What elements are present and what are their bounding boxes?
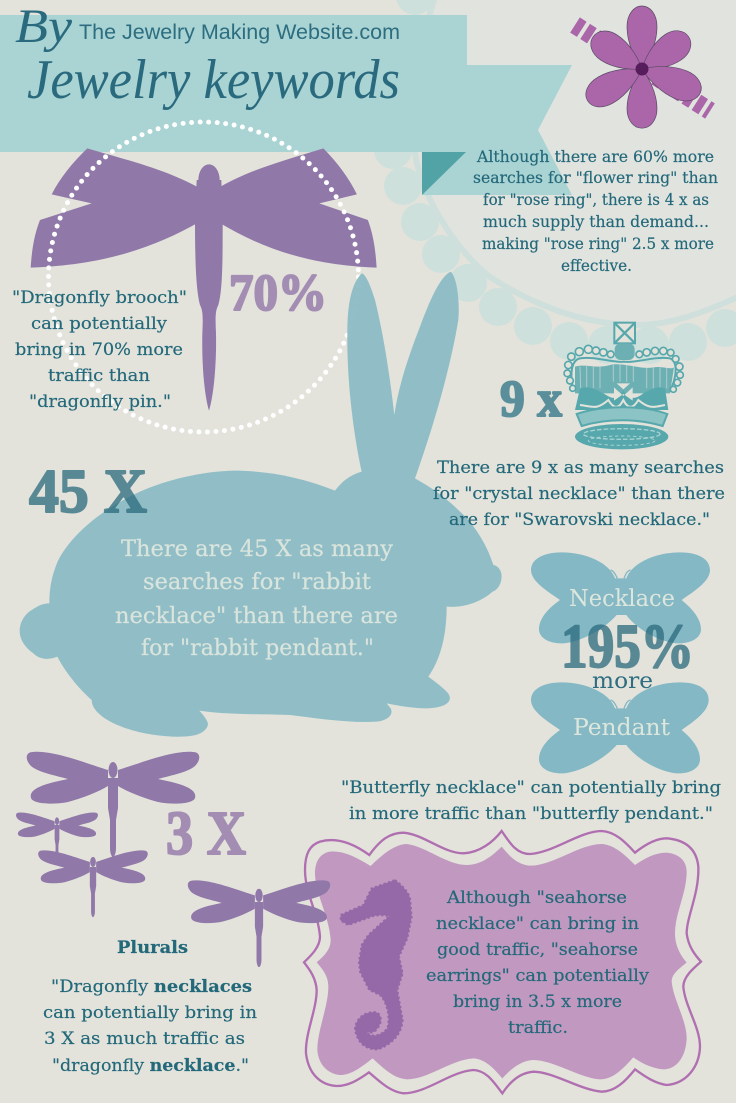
text: dragonfly brooch: can potentially bbox=[31, 314, 167, 334]
icon: large plural dragonfly bbox=[27, 752, 199, 857]
icon: large dragonfly bbox=[31, 148, 377, 411]
icon: butterfly necklace bbox=[531, 552, 710, 643]
stat: 45 X: 45 X bbox=[29, 458, 147, 526]
text: seahorse: good traffic, "seahorse bbox=[437, 940, 638, 960]
text: seahorse: necklace" can bring in bbox=[436, 914, 639, 934]
stat: 3 X: 3 X bbox=[166, 800, 246, 868]
text: rabbit necklace: searches for "rabbit bbox=[143, 570, 371, 595]
icon: medium plural dragonfly bbox=[38, 850, 148, 917]
text: seahorse: Although "seahorse bbox=[446, 888, 627, 908]
text: rabbit necklace: There are 45 X as many bbox=[121, 537, 394, 562]
text: plurals: 3 X as much traffic as bbox=[44, 1029, 245, 1049]
text: butterfly necklace bbox=[341, 778, 721, 824]
stat: 9 x: 9 x bbox=[500, 371, 562, 428]
text: crystal necklace bbox=[433, 458, 725, 530]
text: butterfly necklace: in more traffic than "butterfly pendant." bbox=[349, 804, 713, 824]
text: plurals: "Dragonfly necklaces bbox=[51, 977, 252, 997]
title ribbon bbox=[0, 15, 572, 195]
text: flower ring bbox=[473, 147, 718, 275]
label: more: more bbox=[592, 669, 653, 694]
stat: 70%: 70% bbox=[229, 265, 327, 322]
icon: seahorse bbox=[341, 880, 412, 1049]
text: butterfly necklace: "Butterfly necklace" can potentially bring bbox=[341, 778, 721, 798]
text: crystal necklace: for "crystal necklace" than there bbox=[433, 484, 725, 504]
text: dragonfly brooch: traffic than bbox=[48, 366, 150, 386]
text: flower ring: making "rose ring" 2.5 x more bbox=[482, 234, 714, 253]
byline: The Jewelry Making Website.com bbox=[79, 21, 400, 44]
text: flower ring: Although there are 60% more bbox=[476, 147, 714, 166]
label: Necklace: Necklace bbox=[569, 586, 675, 612]
byline: By bbox=[15, 0, 73, 53]
icon: small plural dragonfly bbox=[16, 813, 98, 863]
text: plurals: can potentially bring in bbox=[43, 1003, 257, 1023]
text: seahorse bbox=[426, 888, 649, 1038]
text: crystal necklace: are for "Swarovski necklace." bbox=[449, 510, 710, 530]
text: plurals bbox=[43, 977, 257, 1076]
text: dragonfly brooch bbox=[12, 288, 187, 412]
stat: 195%: 195% bbox=[561, 613, 694, 681]
text: seahorse: traffic. bbox=[508, 1018, 568, 1038]
panel: seahorse frame bbox=[304, 831, 701, 1093]
title: Jewelry keywords bbox=[27, 49, 400, 111]
icon: crown bbox=[564, 323, 683, 449]
dotted circle bbox=[48, 122, 358, 432]
text: dragonfly brooch: bring in 70% more bbox=[15, 340, 183, 360]
text: seahorse: earrings" can potentially bbox=[426, 966, 649, 986]
text: flower ring: searches for "flower ring" than bbox=[473, 168, 718, 187]
text: rabbit necklace: necklace" than there are bbox=[115, 604, 398, 629]
label: Pendant: Pendant bbox=[573, 715, 671, 741]
text: flower ring: much supply than demand... bbox=[483, 212, 709, 231]
text: crystal necklace: There are 9 x as many searches bbox=[437, 458, 724, 478]
text: flower ring: for "rose ring", there is 4 x as bbox=[483, 190, 709, 209]
icon: rabbit bbox=[20, 272, 502, 737]
text: dragonfly brooch: "Dragonfly brooch" bbox=[12, 288, 187, 308]
icon: overlapping plural dragonfly bbox=[188, 880, 330, 967]
text: dragonfly brooch: "dragonfly pin." bbox=[29, 392, 171, 412]
text: plurals: "dragonfly necklace." bbox=[52, 1056, 249, 1076]
necklace circle with beads bbox=[374, 0, 736, 364]
text: rabbit necklace bbox=[115, 537, 398, 661]
text: flower ring: effective. bbox=[561, 256, 632, 275]
byline bbox=[15, 0, 400, 53]
icon: butterfly pendant bbox=[531, 682, 709, 773]
text: seahorse: bring in 3.5 x more bbox=[453, 992, 622, 1012]
text: rabbit necklace: for "rabbit pendant." bbox=[141, 636, 374, 661]
heading: Plurals: Plurals bbox=[117, 938, 188, 958]
icon: flower bbox=[575, 6, 710, 128]
